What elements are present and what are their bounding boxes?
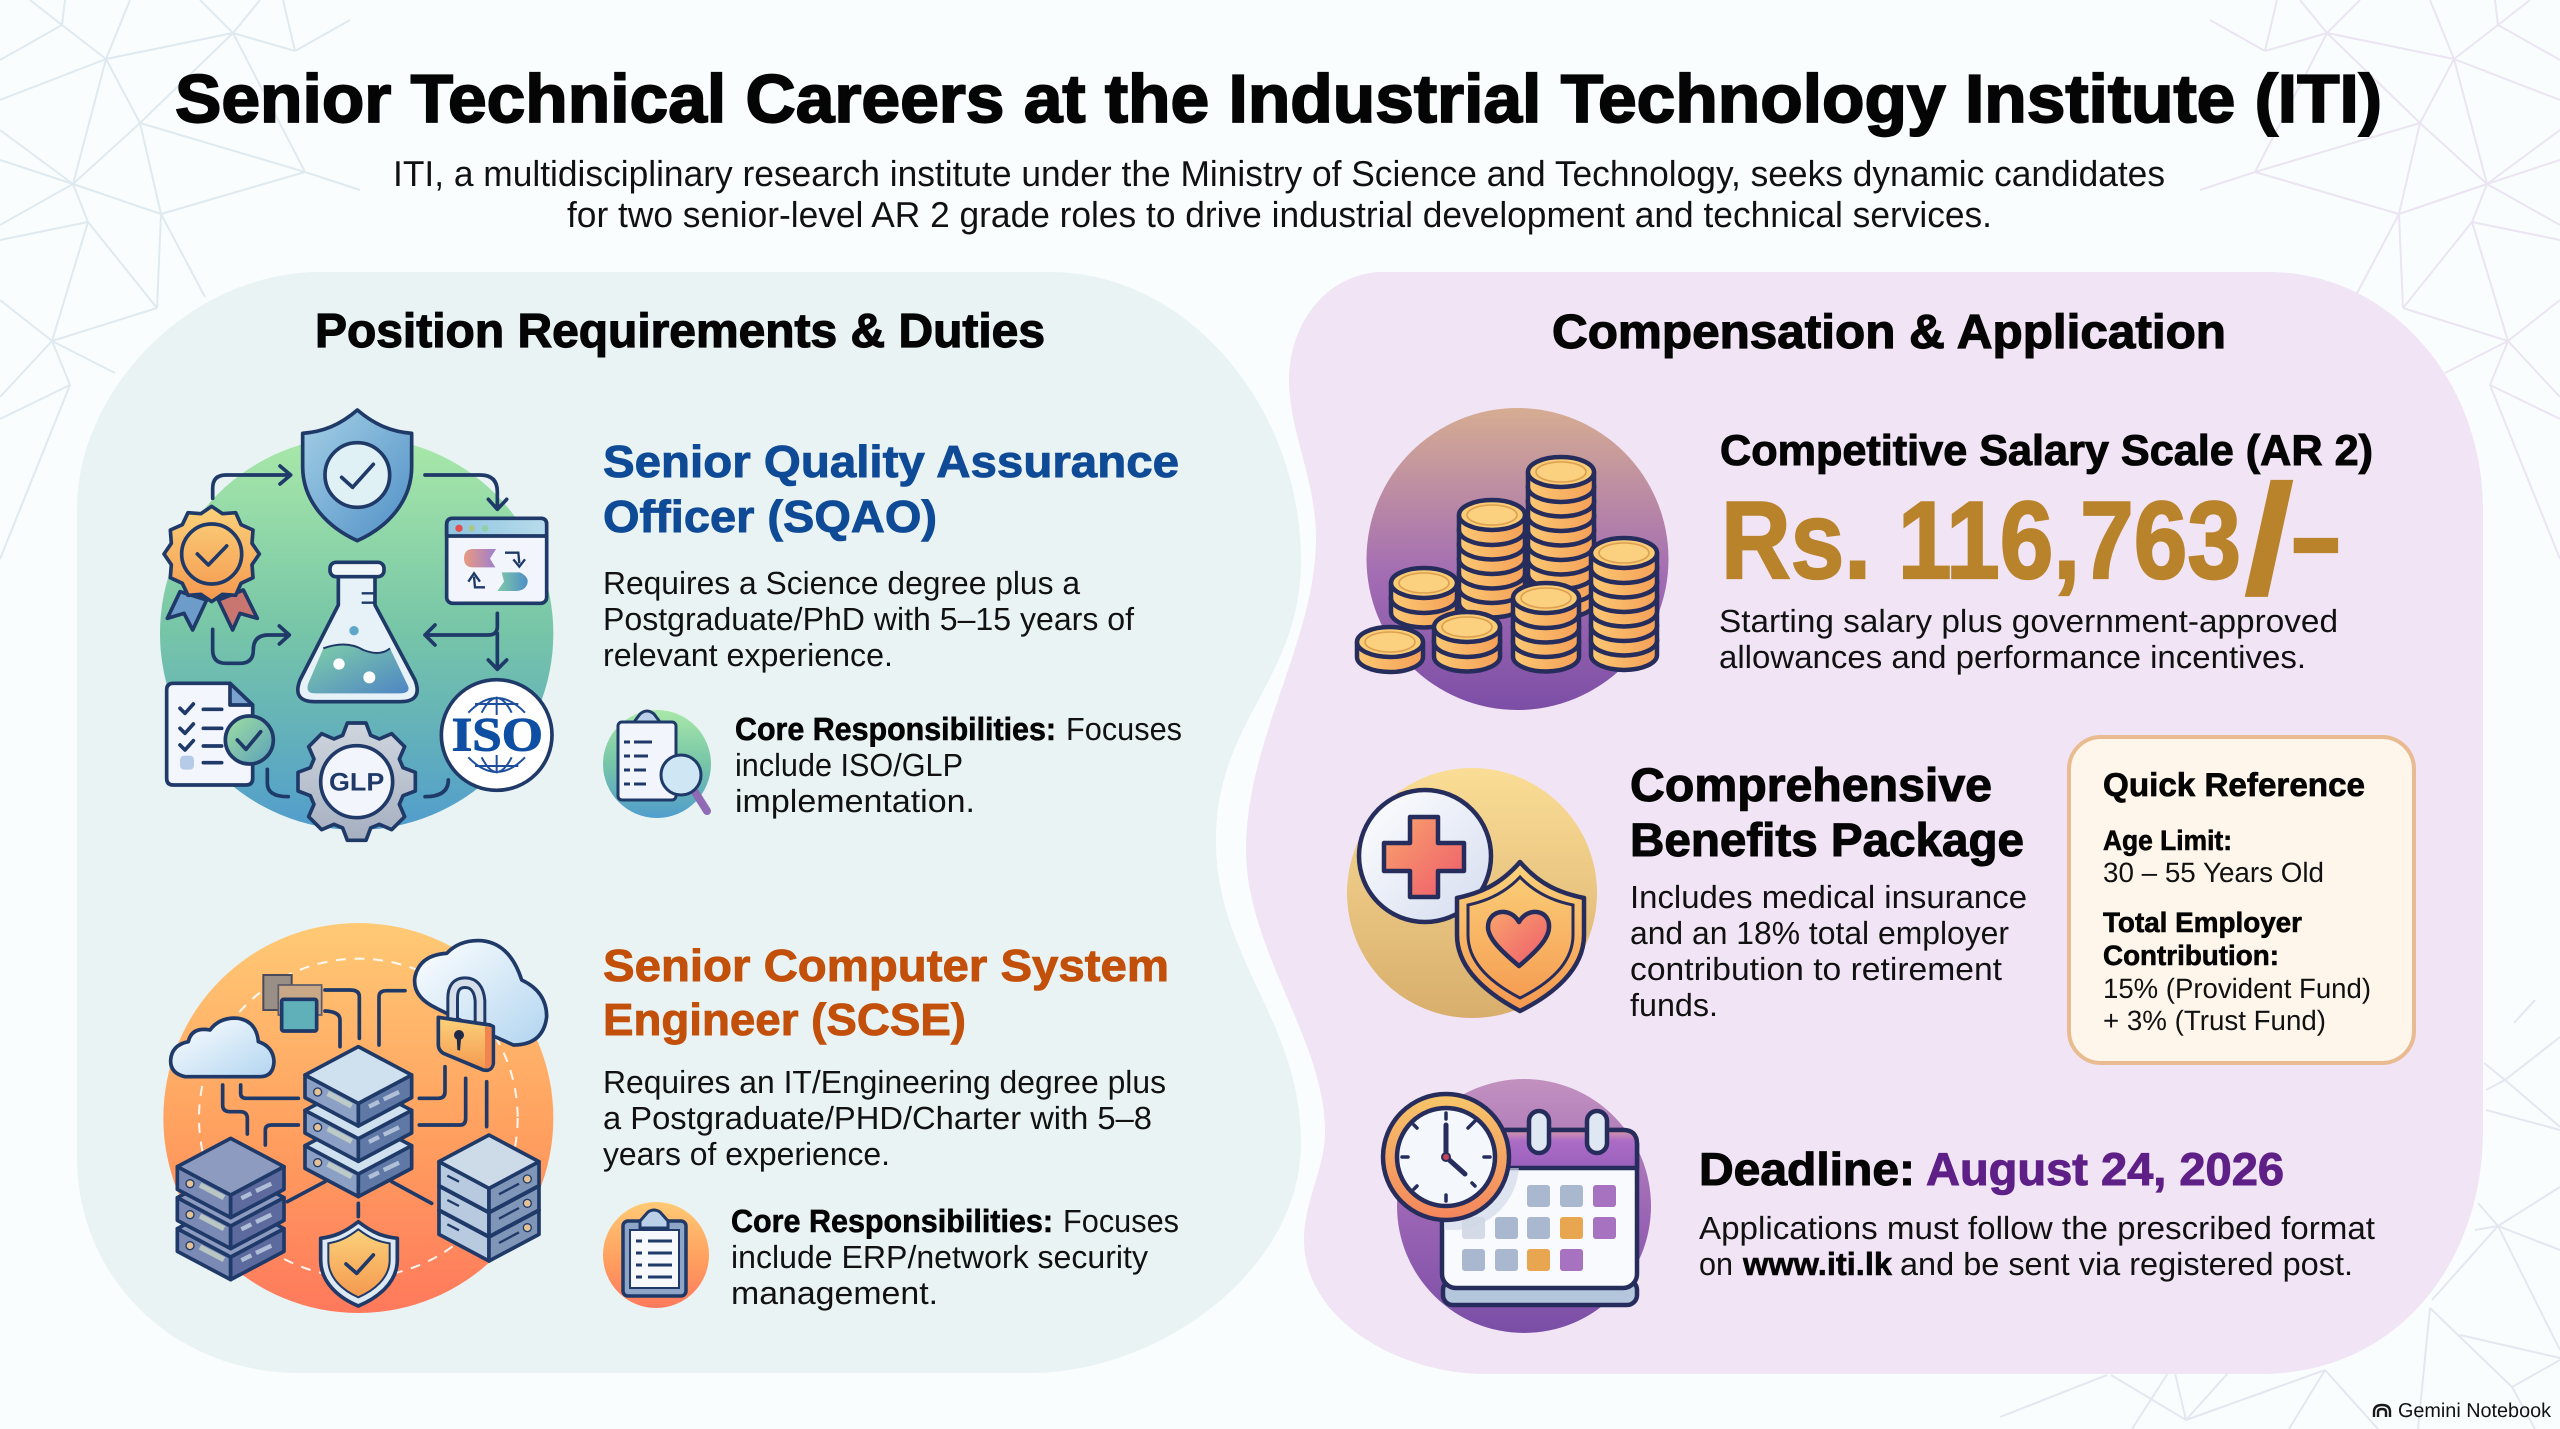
text: SCSE requirements: Requires an IT/Engineering degree plus [603,1064,1166,1100]
text: SCSE requirements [603,1064,1166,1172]
icon: checklist document [167,683,273,785]
intro text: ITI, a multidisciplinary research institute under the Ministry of Science and Technology, seeks dynamic candidates [393,153,2165,194]
salary figure: / [2244,453,2294,626]
heading: comprehensive benefits package: Comprehensive [1630,758,1992,811]
heading: senior computer system engineer: Engineer (SCSE) [603,994,966,1045]
text: application instructions: on [1699,1246,1733,1282]
illustration: computer systems network [163,923,553,1313]
text: SCSE requirements: years of experience. [603,1136,890,1172]
icon: browser window [447,518,547,603]
icon: right server stack [439,1135,539,1261]
text: SQAO core responsibilities: Focuses [1066,711,1182,747]
heading: senior quality assurance officer: Officer (SQAO) [603,491,937,542]
text: SQAO core responsibilities: Core Responsibilities: [735,711,1056,747]
panel: position requirements and duties [77,272,1301,1373]
heading: position requirements: Position Requirements & Duties [315,305,1045,358]
icon: GLP gear [298,723,415,840]
icon: medical cross and heart shield [1347,768,1597,1018]
heading: senior computer system engineer: Senior Computer System [603,940,1169,991]
icon: coin stacks [1357,408,1668,710]
panel: compensation and application [1246,272,2483,1374]
card: quick reference: + 3% (Trust Fund) [2103,1005,2326,1036]
card: quick reference: Age Limit: [2103,825,2232,856]
icon: shield with check [303,410,412,541]
icon: ISO globe badge: ISO [452,708,543,761]
text: SCSE requirements: a Postgraduate/PHD/Charter with 5–8 [603,1100,1152,1136]
illustration: quality assurance cycle [160,410,553,840]
intro text [393,153,2165,235]
icon: security shield [321,1222,397,1306]
text: SQAO core responsibilities: include ISO/GLP [735,747,963,783]
text: application instructions: Applications must follow the prescribed format [1699,1210,2375,1246]
text: SQAO requirements [603,565,1134,673]
text: SQAO requirements: Requires a Science degree plus a [603,565,1080,601]
salary figure [1721,453,2343,626]
text: SCSE core responsibilities: Focuses [1063,1203,1179,1239]
text: benefits details: Includes medical insurance [1630,879,2027,915]
heading: application deadline [1699,1143,2284,1195]
heading: senior quality assurance officer: Senior Quality Assurance [603,436,1179,487]
intro text: for two senior-level AR 2 grade roles to drive industrial development and technical services. [567,194,1992,235]
text: SCSE core responsibilities: management. [731,1275,938,1311]
text: salary details: allowances and performance incentives. [1719,639,2306,675]
card: quick reference: 30 – 55 Years Old [2103,857,2324,888]
text: application instructions: www.iti.lk [1742,1246,1892,1282]
heading: compensation and application: Compensation & Application [1552,306,2226,359]
text: SCSE core responsibilities: include ERP/network security [731,1239,1148,1275]
salary figure: - [2289,475,2343,598]
icon: central server stack [305,1047,412,1197]
card: quick reference: Quick Reference [2103,766,2365,803]
icon: folders [263,975,322,1031]
icon: GLP gear: GLP [329,768,384,796]
text: application instructions [1699,1210,2375,1282]
card: quick reference: Total Employer [2103,907,2302,938]
icon: ISO globe badge [441,680,552,790]
icon: award medal [164,506,259,630]
card: quick reference [2069,737,2414,1063]
text: SQAO requirements: relevant experience. [603,637,893,673]
text: SQAO core responsibilities: implementation. [735,783,975,819]
text: benefits details: funds. [1630,987,1718,1023]
card: quick reference: 15% (Provident Fund) [2103,973,2371,1004]
watermark: Gemini Notebook: Gemini Notebook [2398,1400,2552,1422]
icon: cloud [171,1018,274,1077]
text: benefits details: and an 18% total employer [1630,915,2009,951]
heading: senior computer system engineer [603,940,1169,1045]
salary figure: Rs. 116,763 [1721,479,2241,602]
heading: application deadline: Deadline: [1699,1143,1915,1195]
icon: laboratory flask [298,562,417,702]
text: SCSE core responsibilities [731,1203,1179,1311]
text: SQAO requirements: Postgraduate/PhD with 5–15 years of [603,601,1134,637]
icon: clock and calendar [1383,1079,1651,1333]
icon: cloud with padlock [415,941,547,1070]
title: Senior Technical Careers at the Industrial Technology Institute (ITI) [175,61,2382,137]
heading: comprehensive benefits package: Benefits Package [1630,813,2024,866]
text: benefits details [1630,879,2027,1023]
icon: checklist clipboard [603,1202,709,1308]
heading: senior quality assurance officer [603,436,1179,542]
card: quick reference: Contribution: [2103,940,2279,971]
text: SCSE core responsibilities: Core Responsibilities: [731,1203,1053,1239]
heading: comprehensive benefits package [1630,758,2024,866]
heading: application deadline: August 24, 2026 [1926,1143,2284,1195]
icon: clipboard with magnifier [603,710,711,818]
text: SQAO core responsibilities [735,711,1182,819]
text: benefits details: contribution to retirement [1630,951,2002,987]
text: salary details [1719,603,2338,675]
text: salary details: Starting salary plus government-approved [1719,603,2338,639]
text: application instructions: and be sent via registered post. [1900,1246,2353,1282]
heading: competitive salary scale: Competitive Salary Scale (AR 2) [1720,427,2373,475]
icon: left server stack [177,1138,284,1280]
